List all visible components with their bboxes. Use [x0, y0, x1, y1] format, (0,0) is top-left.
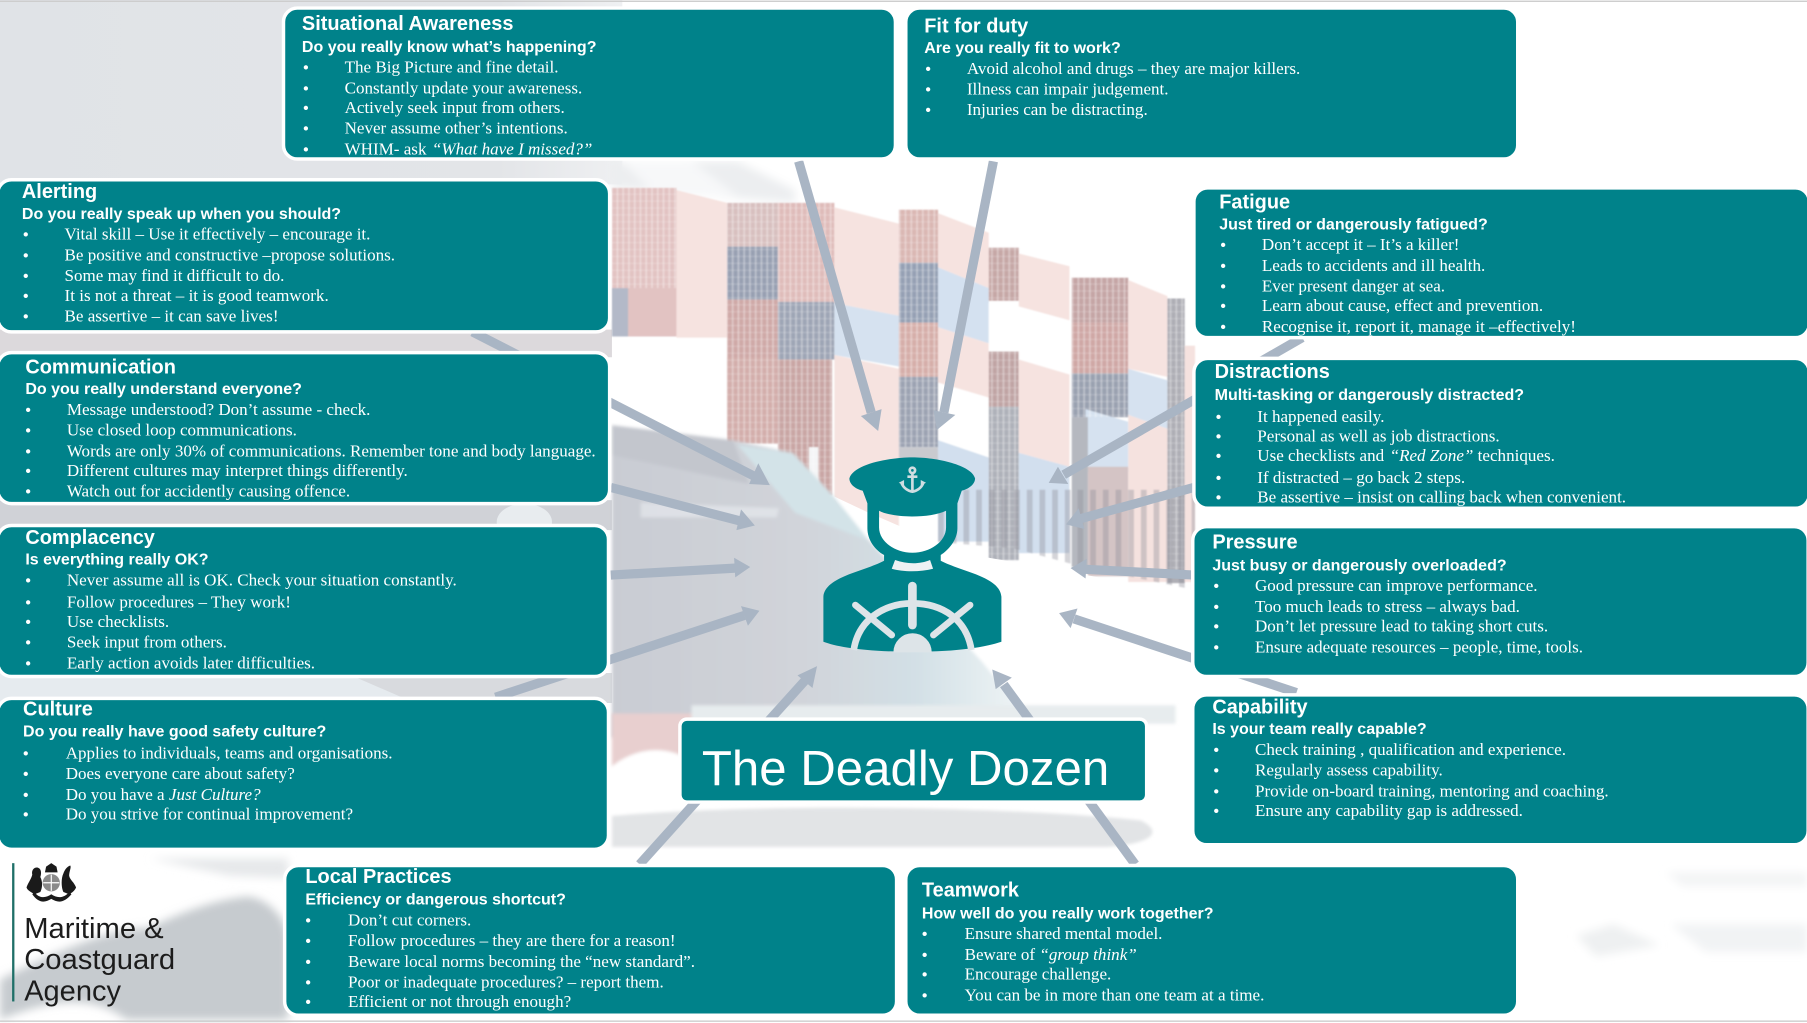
panel: fit for duty: Avoid alcohol and drugs – they are major killers. — [967, 59, 1300, 78]
panel: fit for duty: Are you really fit to work? — [924, 40, 1121, 57]
panel: distractions — [1194, 358, 1807, 508]
panel: capability: Capability — [1212, 696, 1308, 718]
panel: alerting: Be assertive – it can save lives! — [65, 307, 279, 326]
logo: Maritime and Coastguard Agency: Agency — [24, 975, 122, 1007]
panel: communication: Do you really understand everyone? — [25, 381, 302, 398]
white lower edge of the stacks — [832, 496, 1195, 691]
panel: culture: • — [23, 745, 29, 762]
panel: fatigue: • — [1220, 298, 1226, 315]
panel: distractions: • — [1216, 448, 1221, 465]
panel: situational awareness: Constantly update your awareness. — [345, 78, 582, 97]
panel: pressure: • — [1213, 639, 1219, 656]
panel: culture: Does everyone care about safety? — [66, 764, 295, 783]
panel: teamwork — [906, 865, 1518, 1015]
panel: pressure: Ensure adequate resources – people, time, tools. — [1255, 637, 1583, 656]
panel: fatigue: Leads to accidents and ill health. — [1262, 256, 1485, 275]
panel: complacency: Follow procedures – They work! — [67, 592, 291, 611]
panel: capability: Provide on-board training, mentoring and coaching. — [1255, 781, 1609, 800]
panel: alerting: • — [23, 268, 29, 285]
panel: complacency: • — [25, 635, 31, 652]
panel: complacency: Complacency — [25, 527, 155, 549]
panel: local practices: • — [305, 994, 311, 1011]
arrow: communication — [611, 487, 755, 530]
panel: teamwork: • — [922, 947, 927, 964]
panel: local practices: Follow procedures – they are there for a reason! — [348, 931, 676, 950]
panel: complacency: Never assume all is OK. Check your situation constantly. — [67, 570, 457, 589]
panel: teamwork: • — [922, 967, 927, 984]
panel: pressure: Too much leads to stress – always bad. — [1255, 597, 1520, 616]
panel: fatigue: Ever present danger at sea. — [1262, 277, 1445, 296]
panel: local practices: Beware local norms becoming the “new standard”. — [348, 952, 695, 971]
panel: situational awareness: Do you really know what’s happening? — [302, 39, 597, 56]
panel: distractions: • — [1216, 489, 1221, 506]
panel: situational awareness: • — [303, 60, 309, 77]
panel: fatigue — [1194, 188, 1807, 338]
panel: local practices: Local Practices — [305, 866, 452, 888]
panel: teamwork: • — [922, 987, 927, 1004]
panel: alerting: • — [23, 309, 29, 326]
panel: fit for duty: Fit for duty — [924, 15, 1028, 37]
panel: pressure — [1193, 527, 1807, 676]
arrow: situational awareness — [799, 161, 882, 431]
panel: capability: Ensure any capability gap is addressed. — [1255, 801, 1523, 820]
panel: capability — [1193, 695, 1807, 845]
panel: communication: • — [25, 463, 31, 480]
panel: situational awareness: WHIM- ask “What have I missed?” — [345, 139, 592, 158]
panel: complacency: Use checklists. — [67, 612, 169, 631]
arrow: fit for duty — [933, 161, 993, 430]
panel: local practices: Don’t cut corners. — [348, 910, 471, 929]
panel: alerting: • — [23, 288, 29, 305]
panel: fit for duty: • — [925, 61, 931, 78]
panel: situational awareness: • — [303, 100, 309, 117]
panel: teamwork: How well do you really work together? — [922, 905, 1214, 922]
panel: situational awareness: • — [303, 121, 309, 138]
panel: distractions: • — [1216, 428, 1221, 445]
panel: communication: Use closed loop communications. — [67, 421, 297, 440]
panel: distractions: Multi-tasking or dangerously distracted? — [1215, 387, 1524, 404]
panel: culture — [0, 698, 608, 849]
panel: pressure: Just busy or dangerously overloaded? — [1212, 557, 1507, 574]
panel: culture: • — [23, 806, 29, 823]
panel: culture: • — [23, 787, 29, 804]
panel: fit for duty: • — [925, 102, 931, 119]
panel: culture: Culture — [23, 699, 93, 721]
arrow: fatigue — [1049, 338, 1302, 484]
panel: fatigue: • — [1220, 258, 1226, 275]
panel: fatigue: • — [1220, 237, 1226, 254]
panel: complacency: • — [25, 594, 31, 611]
panel: pressure: Good pressure can improve performance. — [1255, 576, 1538, 595]
panel: complacency: Early action avoids later difficulties. — [67, 653, 315, 672]
panel: situational awareness: • — [303, 80, 309, 97]
panel: alerting: Do you really speak up when you should? — [22, 206, 341, 223]
panel: communication: Watch out for accidently causing offence. — [67, 482, 350, 501]
panel: fatigue: Recognise it, report it, manage it –effectively! — [1262, 317, 1576, 336]
icon: royal crest — [27, 863, 76, 902]
sea — [612, 705, 1194, 865]
panel: distractions: It happened easily. — [1257, 407, 1384, 426]
panel: situational awareness: Situational Awareness — [302, 13, 513, 35]
panel: distractions: Be assertive – insist on calling back when convenient. — [1257, 487, 1626, 506]
panel: teamwork: Encourage challenge. — [965, 965, 1111, 984]
panel: communication: Communication — [25, 356, 176, 378]
arrow: distractions — [1066, 487, 1194, 529]
panel: communication: Different cultures may interpret things differently. — [67, 461, 408, 480]
panel: alerting: Be positive and constructive –propose solutions. — [65, 245, 395, 264]
panel: pressure: Don’t let pressure lead to taking short cuts. — [1255, 617, 1548, 636]
panel: fit for duty: Illness can impair judgement. — [967, 79, 1169, 98]
panel: alerting: It is not a threat – it is good teamwork. — [65, 286, 329, 305]
panel: local practices: Poor or inadequate procedures? – report them. — [348, 973, 664, 992]
arrow: teamwork — [992, 670, 1135, 864]
panel: distractions: • — [1216, 470, 1221, 487]
panel: culture: • — [23, 766, 29, 783]
panel: culture: Do you strive for continual improvement? — [66, 804, 353, 823]
title banner: The Deadly Dozen — [702, 741, 1109, 796]
panel: local practices: Efficient or not through enough? — [348, 992, 571, 1011]
panel: complacency: • — [25, 614, 31, 631]
panel: situational awareness: • — [303, 141, 309, 158]
panel: teamwork: You can be in more than one team at a time. — [965, 985, 1264, 1004]
panel: situational awareness: Never assume other’s intentions. — [345, 119, 568, 138]
panel: local practices — [285, 865, 897, 1015]
panel: teamwork: Ensure shared mental model. — [965, 924, 1162, 943]
panel: distractions: • — [1216, 409, 1221, 426]
panel: fatigue: • — [1220, 279, 1226, 296]
panel: distractions: Personal as well as job distractions. — [1257, 426, 1500, 445]
panel: teamwork: Beware of “group think” — [965, 945, 1137, 964]
panel: capability: • — [1213, 803, 1219, 820]
panel: fatigue: Don’t accept it – It’s a killer! — [1262, 235, 1459, 254]
panel: communication: Words are only 30% of communications. Remember tone and body language. — [67, 441, 596, 460]
panel: fatigue: Fatigue — [1219, 192, 1290, 214]
panel: pressure: Pressure — [1212, 532, 1298, 554]
panel: situational awareness: The Big Picture and fine detail. — [345, 58, 559, 77]
panel: distractions: Distractions — [1215, 361, 1330, 383]
panel: complacency: Is everything really OK? — [25, 552, 209, 569]
icon: ship captain at helm — [823, 457, 1001, 652]
arrow: culture — [496, 606, 759, 697]
panel: local practices: Efficiency or dangerous shortcut? — [305, 892, 566, 909]
panel: situational awareness: Actively seek input from others. — [345, 98, 565, 117]
logo: Maritime and Coastguard Agency: Maritime & — [24, 913, 164, 945]
panel: alerting: • — [23, 247, 29, 264]
panel: situational awareness — [284, 8, 895, 159]
panel: local practices: • — [305, 912, 311, 929]
arrow: complacency — [611, 558, 750, 577]
panel: capability: • — [1213, 763, 1219, 780]
panel: distractions: Use checklists and “Red Zone” techniques. — [1257, 446, 1555, 465]
panel: teamwork: • — [922, 926, 927, 943]
panel: fit for duty — [906, 8, 1518, 159]
panel: culture: Do you really have good safety culture? — [23, 723, 326, 740]
panel: capability: • — [1213, 783, 1219, 800]
panel: communication: • — [25, 402, 31, 419]
panel: pressure: • — [1213, 578, 1219, 595]
panel: culture: Do you have a Just Culture? — [66, 785, 261, 804]
panel: local practices: • — [305, 975, 311, 992]
panel: communication: • — [25, 443, 31, 460]
panel: fatigue: Just tired or dangerously fatigued? — [1219, 216, 1488, 233]
panel: alerting: Some may find it difficult to do. — [65, 266, 284, 285]
panel: fit for duty: Injuries can be distracting. — [967, 100, 1148, 119]
panel: alerting: • — [23, 227, 29, 244]
logo: Maritime and Coastguard Agency: Coastguard — [24, 944, 175, 976]
panel: communication — [0, 353, 610, 504]
panel: alerting: Alerting — [22, 181, 97, 203]
arrow: alerting — [472, 332, 770, 485]
arrow: capability — [1059, 608, 1296, 693]
panel: culture: Applies to individuals, teams and organisations. — [66, 743, 393, 762]
logo: Maritime and Coastguard Agency — [12, 863, 175, 1007]
panel: complacency: Seek input from others. — [67, 633, 227, 652]
panel: capability: • — [1213, 742, 1219, 759]
panel: complacency: • — [25, 655, 31, 672]
title banner — [680, 719, 1147, 802]
panel: alerting — [0, 180, 610, 332]
arrow: local practices — [640, 666, 817, 864]
panel: capability: Check training , qualification and experience. — [1255, 740, 1566, 759]
panel: fatigue: • — [1220, 319, 1226, 336]
panel: complacency: • — [25, 572, 31, 589]
panel: communication: Message understood? Don’t assume - check. — [67, 400, 370, 419]
panel: complacency — [0, 526, 608, 676]
panel: teamwork: Teamwork — [922, 880, 1020, 902]
panel: fatigue: Learn about cause, effect and prevention. — [1262, 296, 1543, 315]
arrow: pressure — [1071, 559, 1194, 579]
panel: pressure: • — [1213, 599, 1219, 616]
container stacks — [612, 188, 1195, 590]
panel: communication: • — [25, 423, 31, 440]
panel: capability: Is your team really capable? — [1212, 721, 1427, 738]
panel: alerting: Vital skill – Use it effectively – encourage it. — [65, 225, 370, 244]
panel: distractions: If distracted – go back 2 steps. — [1257, 468, 1465, 487]
panel: communication: • — [25, 484, 31, 501]
panel: local practices: • — [305, 954, 311, 971]
panel: pressure: • — [1213, 619, 1219, 636]
panel: capability: Regularly assess capability. — [1255, 761, 1443, 780]
panel: fit for duty: • — [925, 81, 931, 98]
ship hull — [612, 425, 1037, 738]
panel: local practices: • — [305, 933, 311, 950]
